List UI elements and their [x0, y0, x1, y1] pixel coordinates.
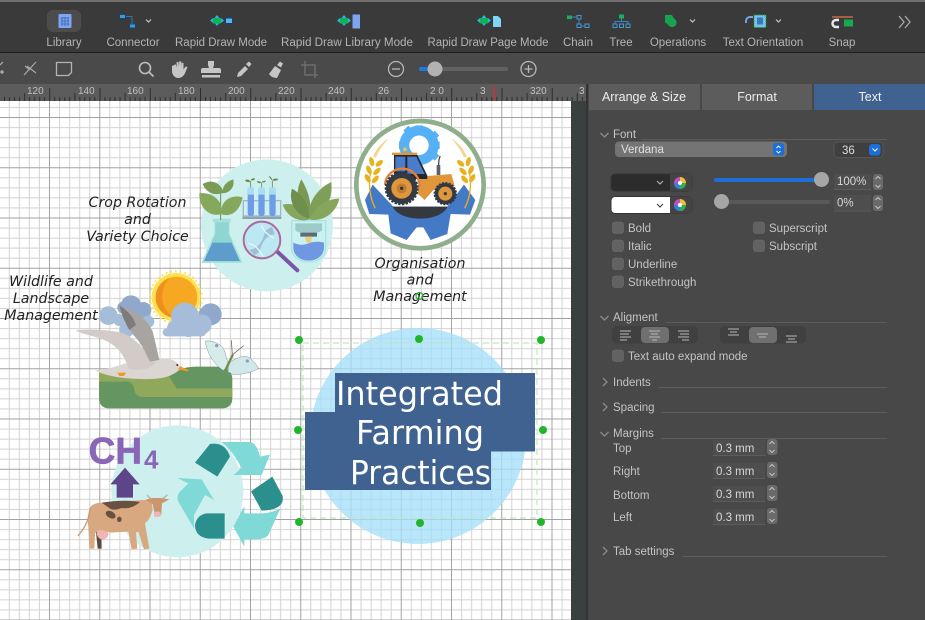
section: Margins: Left [613, 512, 633, 524]
label: CH4: CH [89, 429, 142, 471]
icon: stamp [201, 61, 221, 78]
tool: Rapid Draw Mode: Rapid Draw Mode [175, 37, 267, 49]
icon: eyedropper [237, 62, 252, 77]
checkboxes: text styles [612, 222, 828, 289]
zoom slider [388, 62, 536, 76]
section: Margins [600, 428, 887, 524]
section: Margins: Bottom [613, 490, 649, 502]
margin value fields: 0.3 mm [716, 489, 754, 501]
font size field: 36 [842, 145, 855, 157]
section: Indents [603, 377, 887, 389]
label: wildlife and landscape: Management [4, 308, 98, 324]
ruler: 220 [278, 86, 295, 97]
margin value fields: 0.3 mm [716, 466, 754, 478]
opacity sliders: 100% [837, 176, 866, 188]
title: Integrated Farming Practices: Practices [350, 453, 491, 492]
tab: Format: Format [737, 90, 777, 104]
checkboxes: text styles: Subscript [769, 241, 818, 253]
ruler: 240 [328, 86, 345, 97]
tool: Library: Library [46, 37, 82, 49]
label: crop rotation: and [124, 212, 152, 228]
icon: butterfly [205, 340, 259, 374]
ruler: 3 [480, 86, 486, 97]
checkboxes: text styles: Strikethrough [628, 277, 696, 289]
icon: small light blue gear [399, 125, 440, 166]
illustration: organisation and management badge [356, 121, 484, 248]
tool: Rapid Draw Library Mode: Rapid Draw Library Mode [281, 37, 413, 49]
tool: Chain [563, 16, 593, 49]
title: Integrated Farming Practices: Farming [356, 413, 484, 452]
section: Font: Font [613, 129, 637, 141]
tool: Connector: Connector [106, 37, 160, 49]
illustration: wildlife and landscape [76, 271, 259, 408]
tool: Chain: Chain [563, 37, 593, 49]
opacity sliders [714, 172, 883, 211]
title: Integrated Farming Practices: Integrated [336, 374, 503, 413]
tool: Text Orientation [723, 15, 803, 49]
section: Margins: Top [613, 443, 632, 455]
checkboxes: text styles: Superscript [769, 223, 828, 235]
ruler [0, 84, 588, 101]
icon: magnifier [140, 62, 154, 76]
section: Margins: Margins [613, 428, 654, 440]
label: wildlife and landscape: Wildlife and [9, 274, 94, 290]
margin value fields: 0.3 mm [716, 512, 754, 524]
icon: recycle light arrows [177, 442, 281, 547]
section: Tab settings [603, 546, 887, 558]
label: crop rotation: Variety Choice [86, 229, 189, 245]
tab: Text: Text [859, 90, 882, 104]
arrow: rising methane [110, 468, 140, 498]
ruler: 3 [579, 86, 585, 97]
section: Indents: Indents [613, 377, 651, 389]
icon: cow [78, 495, 169, 549]
section: Spacing: Spacing [613, 402, 655, 414]
icon: crop [301, 61, 318, 78]
icon: hand [172, 61, 188, 78]
ruler: 320 [530, 86, 547, 97]
tool: Rapid Draw Page Mode [428, 15, 548, 49]
label: organisation and management: and [407, 272, 434, 288]
icon: format brush [269, 62, 283, 78]
ruler: 2 0 [430, 86, 444, 97]
icon: scissors pen [24, 62, 36, 75]
ruler: 120 [27, 86, 44, 97]
tool: Rapid Draw Library Mode [281, 14, 413, 49]
checkboxes: text styles: Italic [628, 241, 652, 253]
ruler: 180 [178, 86, 195, 97]
icon: sun [150, 271, 202, 323]
section: Tab settings: Tab settings [613, 546, 675, 558]
margin value fields [713, 439, 778, 524]
secondary toolbar [0, 53, 925, 84]
section: Alignment: Text auto expand mode [628, 351, 748, 363]
illustration: crop rotation circle [199, 159, 339, 291]
tool: Snap [829, 17, 855, 49]
selection frame with handles [294, 292, 547, 527]
section: Alignment: Aligment [613, 312, 659, 324]
icon: flask with seedling [199, 179, 243, 262]
label: organisation and management: Management [373, 289, 467, 305]
top toolbar [0, 0, 925, 53]
ruler: 26 [378, 86, 390, 97]
icon: ground under tractor [393, 207, 448, 219]
section: Spacing [603, 402, 887, 414]
opacity sliders: 0% [837, 198, 854, 210]
label: crop rotation: Crop Rotation [89, 195, 186, 211]
section: Font [600, 129, 887, 289]
tool: Rapid Draw Mode [175, 15, 267, 49]
icon: wheat right [451, 139, 477, 208]
icon: magnifying glass with DNA [244, 222, 297, 270]
tool: Tree [609, 14, 633, 49]
icon: potted plant beaker [283, 179, 339, 262]
tool: Operations: Operations [650, 37, 706, 49]
ruler: 200 [228, 86, 245, 97]
icon: wheat left [363, 139, 389, 208]
tool: Operations [650, 15, 706, 49]
ruler: 140 [78, 86, 95, 97]
checkboxes: text styles: Bold [628, 223, 651, 235]
tool: Library [46, 10, 82, 49]
icon: green landscape [99, 367, 232, 408]
checkboxes: text styles: Underline [628, 259, 677, 271]
tool: Text Orientation: Text Orientation [723, 37, 803, 49]
section: Alignment [600, 312, 887, 363]
icon: clouds [99, 295, 222, 337]
icon: test tubes with sprouts [242, 176, 281, 219]
tab: Text [814, 84, 925, 110]
tool: Rapid Draw Page Mode: Rapid Draw Page Mode [428, 37, 548, 49]
dropdown: Verdana: Verdana [621, 144, 664, 156]
label: wildlife and landscape: Landscape [13, 291, 89, 307]
tab: Format [702, 84, 812, 110]
label: organisation and management: Organisation [375, 256, 465, 272]
panel: text properties [600, 129, 887, 558]
tab: Arrange & Size [589, 84, 700, 110]
tab: Arrange & Size: Arrange & Size [602, 90, 686, 104]
label: CH4: 4 [144, 444, 159, 474]
dropdown: Verdana [615, 142, 787, 157]
tool: Connector [106, 14, 160, 49]
canvas with grid [0, 84, 588, 620]
icon: tractor [385, 147, 456, 204]
icon: more chevrons [899, 16, 910, 28]
ruler: 160 [127, 86, 144, 97]
tool: Tree: Tree [609, 37, 633, 49]
main circle [310, 328, 526, 544]
color wells [611, 174, 692, 214]
icon: seagull [76, 305, 189, 379]
icon: note [56, 62, 72, 76]
font size field [834, 142, 883, 158]
icon: recycle dark segments [195, 444, 283, 539]
tool: Snap: Snap [829, 37, 855, 49]
icon: point tool [0, 62, 4, 74]
illustration: methane and recycling [78, 425, 283, 557]
panel: tabs [588, 84, 925, 110]
section: Margins: Right [613, 466, 641, 478]
icon: large blue gear [365, 185, 475, 240]
margin value fields: 0.3 mm [716, 443, 754, 455]
title: Integrated Farming Practices [305, 373, 535, 492]
